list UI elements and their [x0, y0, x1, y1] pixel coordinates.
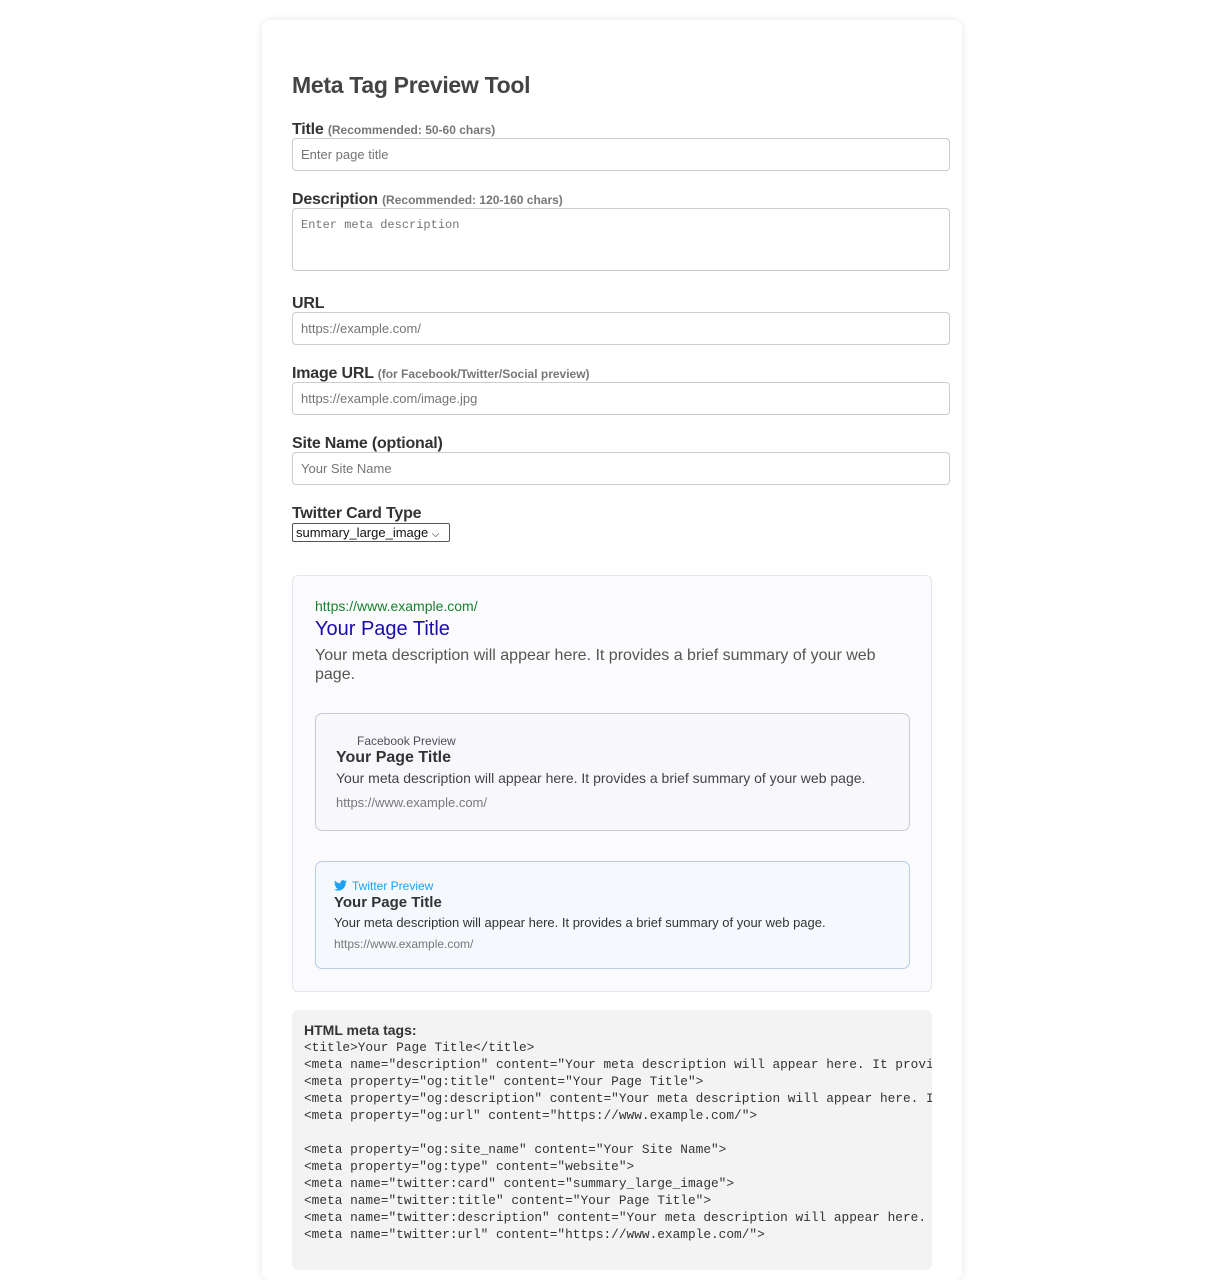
facebook description: Your meta description will appear here. It provides a brief summary of your web page.	[336, 770, 865, 786]
label: twitter card type: Twitter Card Type	[292, 505, 421, 522]
twitter label with icon: Twitter Preview	[352, 879, 433, 893]
title: Meta Tag Preview Tool	[292, 72, 530, 98]
facebook url: https://www.example.com/	[336, 795, 487, 810]
input: site name	[292, 452, 950, 485]
google description: Your meta description will appear here. It provides a brief summary of your web page.	[315, 647, 876, 683]
input: title	[292, 138, 950, 171]
panel: html meta tags code	[292, 1010, 932, 1270]
google url: https://www.example.com/	[315, 598, 478, 614]
facebook label: Facebook Preview	[357, 734, 456, 748]
twitter url: https://www.example.com/	[334, 937, 473, 951]
facebook title: Your Page Title	[336, 749, 451, 766]
panel: facebook preview	[315, 713, 910, 831]
label: title: Title (Recommended: 50-60 chars)	[292, 121, 495, 138]
input: image url	[292, 382, 950, 415]
input: title: Enter page title	[301, 147, 388, 162]
panel: twitter preview	[315, 861, 910, 969]
textarea: description	[292, 208, 950, 271]
twitter description: Your meta description will appear here. It provides a brief summary of your web page.	[334, 915, 826, 930]
twitter title: Your Page Title	[334, 894, 442, 911]
label: url: URL	[292, 295, 324, 312]
label: site name: Site Name (optional)	[292, 435, 443, 452]
label: description: Description (Recommended: 120-160 chars)	[292, 191, 563, 208]
label: image url: Image URL (for Facebook/Twitter/Social preview)	[292, 365, 590, 382]
select: card type: summary_large_image ⌵	[296, 525, 439, 540]
panel: previews	[292, 575, 932, 992]
input: image url: https://example.com/image.jpg	[301, 391, 477, 406]
google title: Your Page Title	[315, 618, 450, 640]
panel: main card	[262, 20, 962, 1280]
code heading: HTML meta tags:	[304, 1022, 417, 1038]
input: site name: Your Site Name	[301, 461, 392, 476]
textarea: description: Enter meta description	[301, 218, 459, 232]
input: url: https://example.com/	[301, 321, 421, 336]
input: url	[292, 312, 950, 345]
